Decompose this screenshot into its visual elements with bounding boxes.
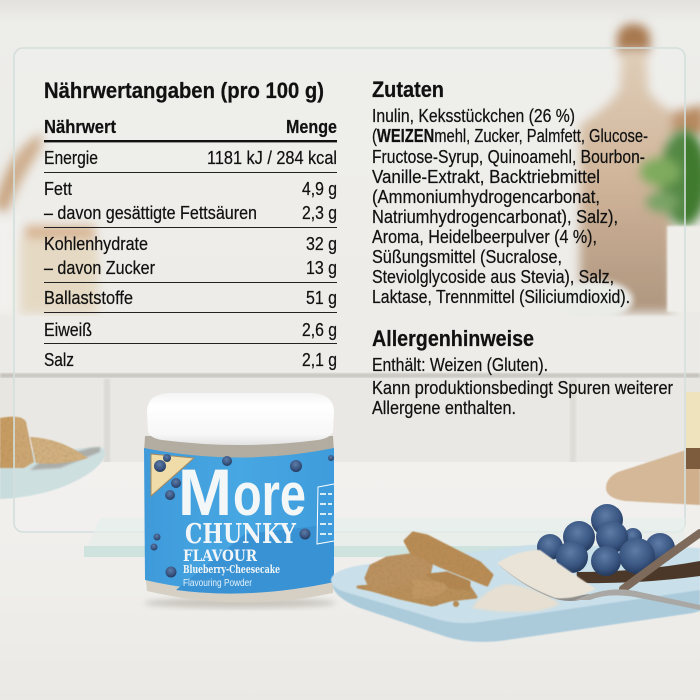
table header row: Nährwert bbox=[44, 117, 116, 137]
row: Eiweiß bbox=[44, 320, 337, 344]
table header row bbox=[44, 117, 337, 142]
ingredients text: Aroma, Heidelbeerpulver (4 %), bbox=[372, 227, 597, 247]
row: Kohlenhydrate: Kohlenhydrate bbox=[44, 234, 148, 254]
product name: CHUNKY bbox=[185, 519, 297, 550]
jar rim bbox=[144, 436, 334, 459]
row: Eiweiß: 2,6 g bbox=[302, 320, 337, 340]
heading: allergens: Allergenhinweise bbox=[372, 326, 534, 351]
label darker diagonal band bbox=[176, 524, 334, 594]
loose powder bbox=[472, 584, 560, 612]
logo bbox=[178, 455, 306, 529]
ingredients text: Süßungsmittel (Sucralose, bbox=[372, 247, 562, 267]
product type: Flavouring Powder bbox=[183, 578, 253, 589]
ingredients text: Steviolglycoside aus Stevia), Salz, bbox=[372, 267, 614, 287]
jar lid bbox=[147, 393, 334, 445]
powder on spoon bbox=[497, 550, 596, 598]
left blurred wooden objects bbox=[0, 133, 98, 315]
row: Kohlenhydrate bbox=[44, 234, 337, 283]
side nutrition box bbox=[317, 484, 334, 544]
jar label bbox=[144, 448, 334, 592]
plate bbox=[331, 545, 700, 642]
blueberries bbox=[537, 504, 675, 576]
ingredients text bbox=[372, 106, 648, 307]
row: Kohlenhydrate: 32 g bbox=[306, 234, 337, 254]
spoon bbox=[497, 550, 700, 610]
shelf and cabinets bbox=[0, 316, 700, 464]
ingredients text: Fructose-Syrup, Quinoamehl, Bourbon- bbox=[372, 147, 645, 167]
ingredients text: Natriumhydrogencarbonat), Salz), bbox=[372, 207, 618, 227]
row: Salz: Salz bbox=[44, 350, 74, 370]
allergen text bbox=[372, 355, 673, 418]
allergen text: Enthält: Weizen (Gluten). bbox=[372, 355, 548, 375]
ingredients text: (Ammoniumhydrogencarbonat, bbox=[372, 187, 600, 207]
row: Salz: 2,1 g bbox=[302, 350, 337, 370]
vanilla pod bbox=[623, 533, 700, 589]
row: Fett bbox=[44, 179, 337, 228]
row: Fett: 2,3 g bbox=[302, 203, 337, 223]
flavour word: FLAVOUR bbox=[183, 546, 258, 565]
pot bbox=[667, 226, 700, 312]
row: Ballaststoffe bbox=[44, 288, 337, 313]
row: Energie: 1181 kJ / 284 kcal bbox=[207, 148, 337, 168]
allergen text: Allergene enthalten. bbox=[372, 398, 516, 418]
jar shadow bbox=[144, 598, 336, 608]
bowl under blueberries bbox=[577, 561, 700, 583]
plant bbox=[640, 130, 700, 226]
ingredients text: Inulin, Keksstückchen (26 %) bbox=[372, 106, 575, 126]
row: Energie: Energie bbox=[44, 148, 98, 168]
row: Ballaststoffe: Ballaststoffe bbox=[44, 288, 133, 308]
row: Kohlenhydrate: 13 g bbox=[306, 258, 337, 278]
heading: nutrition: Nährwertangaben (pro 100 g) bbox=[44, 78, 324, 103]
cutting board bbox=[580, 24, 700, 312]
cutting board with cheesecake, right bbox=[606, 392, 700, 505]
logo: ore bbox=[233, 461, 306, 528]
ingredients text: (WEIZENmehl, Zucker, Palmfett, Glucose- bbox=[372, 126, 648, 146]
product jar bbox=[144, 393, 336, 608]
marble counter bbox=[0, 462, 700, 700]
row: Salz bbox=[44, 350, 337, 370]
row: Eiweiß: Eiweiß bbox=[44, 320, 92, 340]
row: Energie bbox=[44, 148, 337, 173]
row: Fett: – davon gesättigte Fettsäuren bbox=[44, 203, 257, 223]
ingredients text: Vanille-Extrakt, Backtriebmittel bbox=[372, 167, 600, 187]
row: Kohlenhydrate: – davon Zucker bbox=[44, 258, 155, 278]
biscuits bbox=[358, 533, 492, 607]
jar bottom powder bbox=[145, 570, 334, 603]
label blueberries bbox=[150, 454, 334, 578]
row: Fett: Fett bbox=[44, 179, 72, 199]
row: Ballaststoffe: 51 g bbox=[306, 288, 337, 308]
plate with biscuits, powder and blueberries bbox=[331, 504, 700, 642]
cheesecake corner bbox=[151, 454, 194, 496]
table header row: Menge bbox=[286, 117, 337, 137]
flavour name: Blueberry-Cheesecake bbox=[183, 563, 280, 576]
logo: M bbox=[178, 455, 232, 529]
bowl with biscuits, left bbox=[0, 417, 105, 499]
blurred bowl on shelf bbox=[557, 280, 633, 320]
row: Fett: 4,9 g bbox=[302, 179, 337, 199]
nutrition table bbox=[44, 78, 337, 370]
glass foot bbox=[84, 518, 685, 556]
glass panel bbox=[14, 48, 685, 557]
heading: ingredients: Zutaten bbox=[372, 77, 444, 102]
ingredients text: Laktase, Trennmittel (Siliciumdioxid). bbox=[372, 287, 630, 307]
allergen text: Kann produktionsbedingt Spuren weiterer bbox=[372, 378, 673, 398]
